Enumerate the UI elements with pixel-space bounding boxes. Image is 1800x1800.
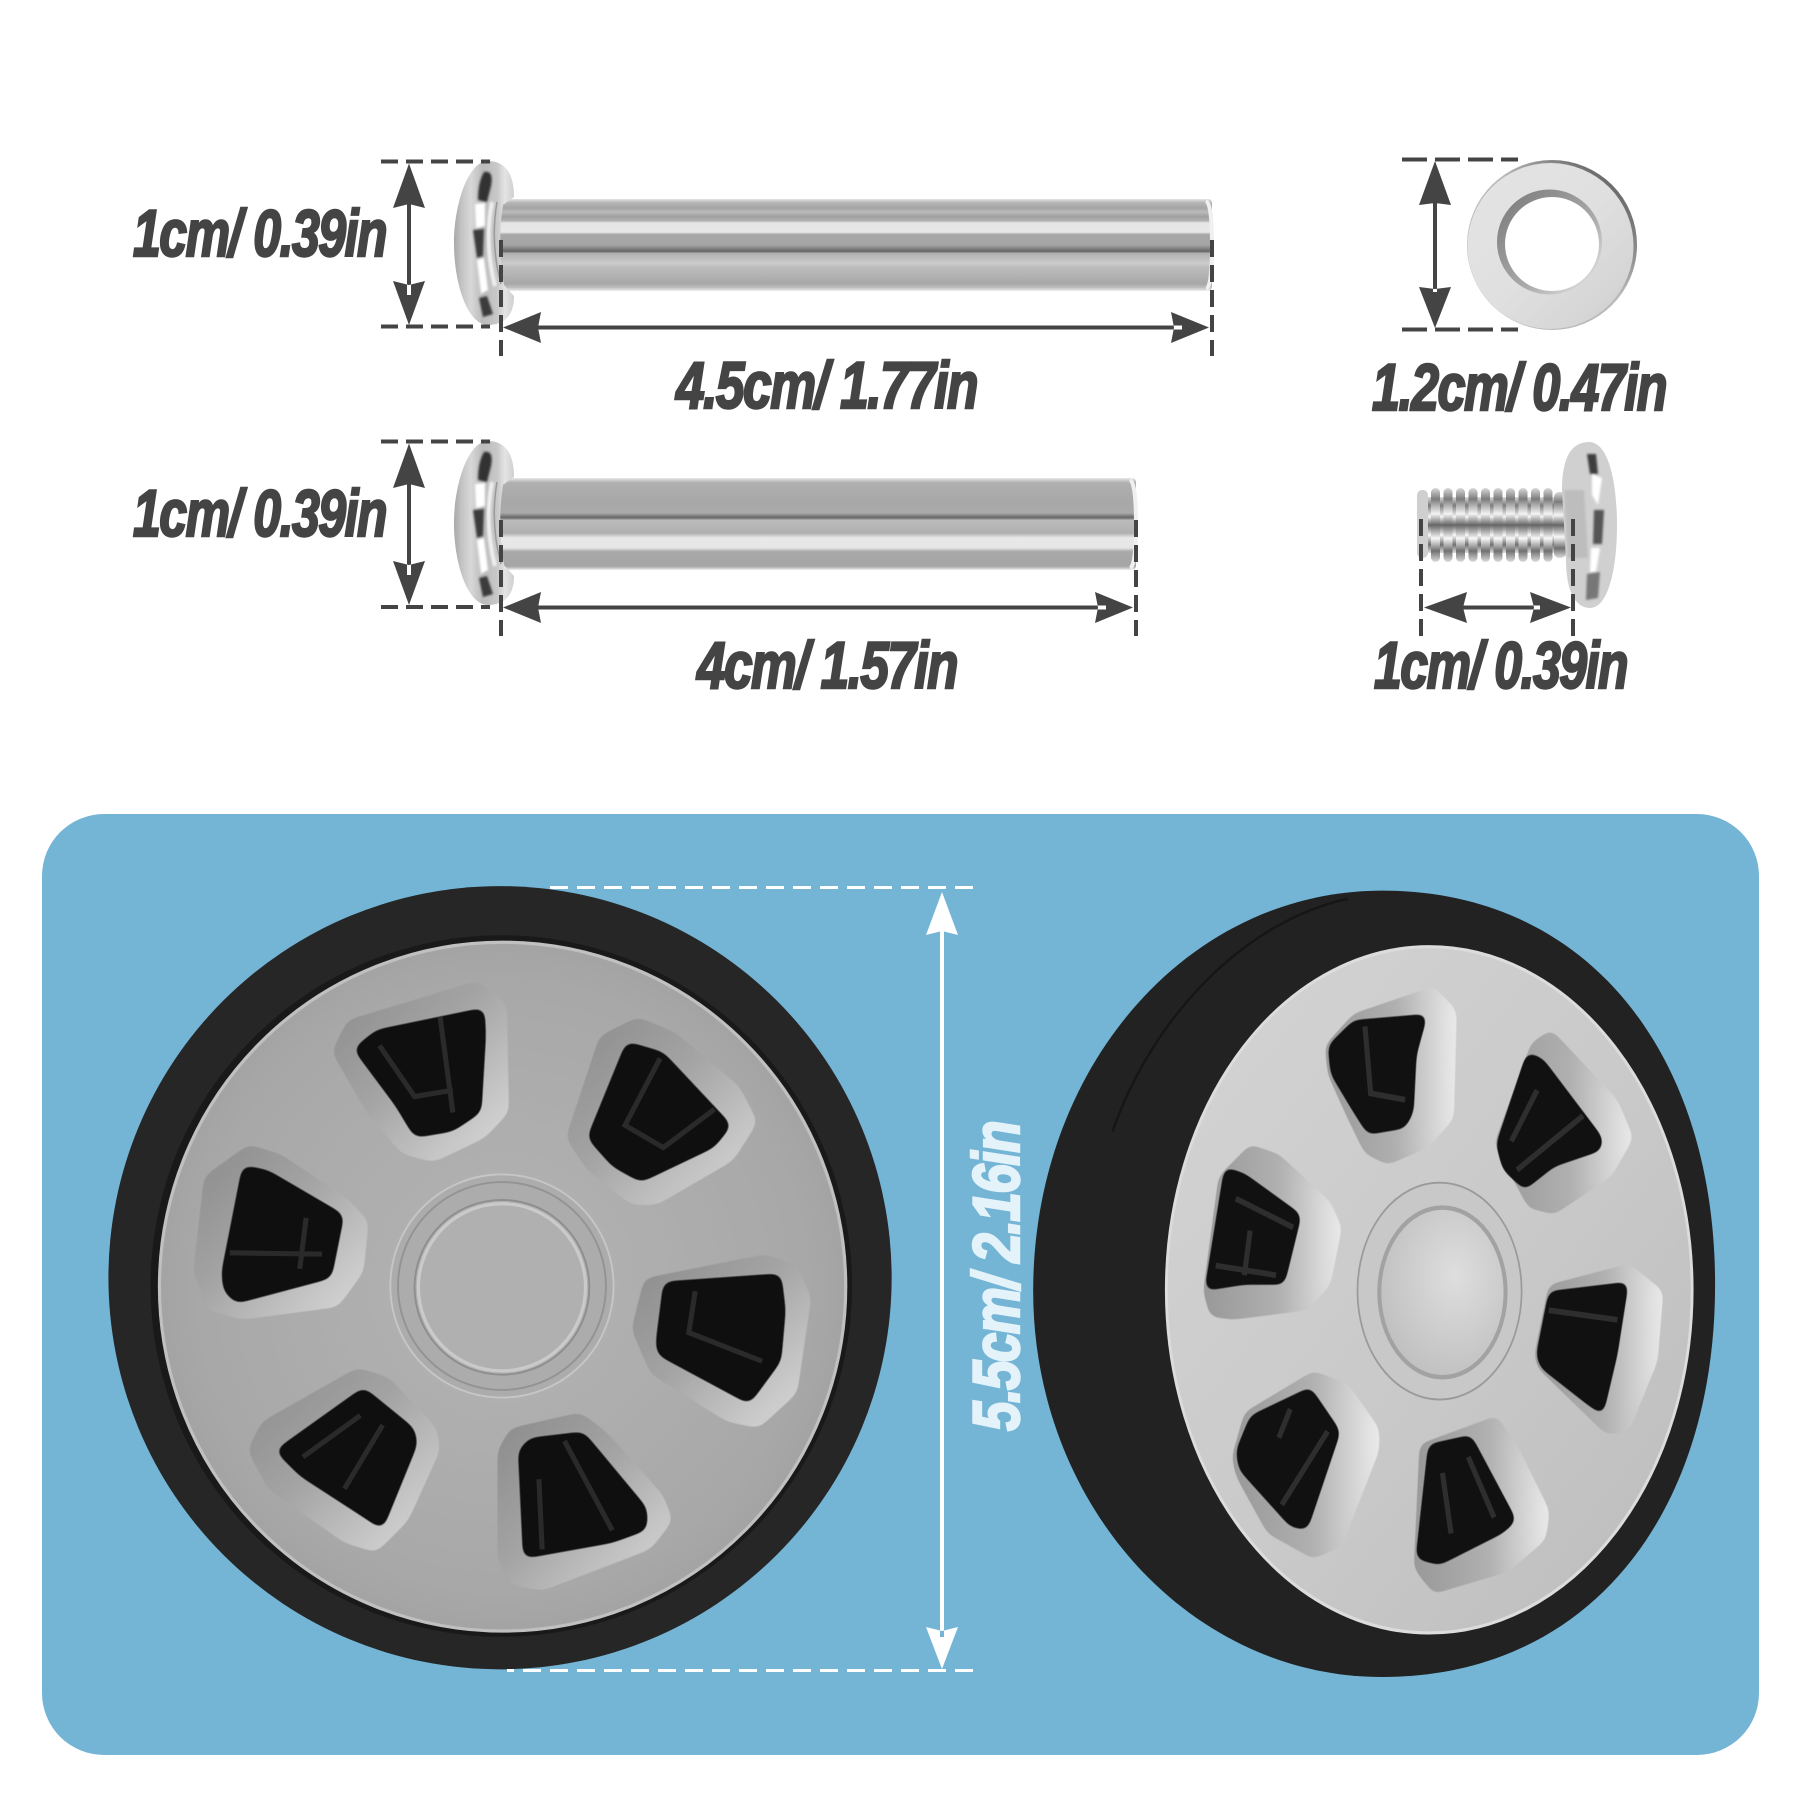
- height arrow: [393, 444, 425, 605]
- spoke hole: left: [193, 1144, 369, 1320]
- spoke hole: top: [332, 980, 509, 1162]
- height arrow: [393, 164, 425, 325]
- label: long axle length: 4.5cm/ 1.77in: [674, 348, 977, 422]
- screw thread: [1417, 488, 1567, 562]
- length dashes: [501, 240, 1212, 356]
- long axle end cap: [1206, 201, 1212, 289]
- short axle end cap: [1130, 480, 1136, 568]
- tire: [108, 886, 892, 1669]
- length dashes: [501, 520, 1136, 636]
- bolt 4cm with dimensions: [381, 441, 1136, 636]
- spoke hole: right: [1534, 1264, 1663, 1435]
- spoke hole: top right: [1494, 1030, 1634, 1215]
- screw arrow: [1424, 592, 1571, 623]
- hub: [390, 1174, 614, 1398]
- label: washer size: 1.2cm/ 0.47in: [1372, 350, 1666, 424]
- bolt 4.5cm with dimensions: [381, 161, 1212, 356]
- panel: blue background: [42, 814, 1759, 1755]
- label: short axle length: 4cm/ 1.57in: [695, 628, 957, 702]
- tire body: [1033, 891, 1715, 1677]
- spoke hole: top right: [566, 1017, 758, 1205]
- label: short axle head size: 1cm/ 0.39in: [133, 476, 386, 550]
- screw with dimension: [1417, 442, 1617, 636]
- spoke hole: bottom: [1414, 1415, 1550, 1594]
- length arrow: [503, 312, 1209, 343]
- spoke hole: bottom left: [247, 1368, 440, 1553]
- screw head: [1562, 442, 1617, 608]
- spoke hole: bottom left: [1232, 1371, 1379, 1559]
- short axle shaft: [497, 478, 1136, 570]
- spoke hole: left: [1203, 1144, 1342, 1320]
- wheel: angled view: [1033, 891, 1715, 1677]
- silver plate: [1166, 947, 1692, 1633]
- long axle shaft: [497, 199, 1212, 291]
- wheel: front view: [108, 886, 892, 1669]
- height dashes and head: [381, 161, 514, 326]
- label: wheel diameter: 5.5cm/ 2.16in: [959, 1122, 1033, 1431]
- spoke hole: right: [631, 1254, 811, 1428]
- washer ring: [1467, 160, 1637, 330]
- length arrow: [503, 592, 1133, 623]
- dashed guides: [507, 888, 973, 1670]
- label: screw length: 1cm/ 0.39in: [1374, 628, 1627, 702]
- tire seam: [1112, 899, 1348, 1132]
- height dashes: [381, 442, 490, 607]
- short axle head: [454, 441, 514, 605]
- washer arrow: [1419, 161, 1451, 328]
- hub: [1357, 1183, 1522, 1400]
- silver plate: [159, 942, 846, 1631]
- label: long axle head size: 1cm/ 0.39in: [133, 196, 386, 270]
- white arrow: [926, 892, 958, 1669]
- spoke hole: top: [1325, 986, 1457, 1165]
- spoke hole: bottom: [497, 1412, 673, 1591]
- screw dashes: [1421, 519, 1573, 636]
- washer dashes: [1402, 160, 1518, 330]
- white height dimension: [507, 888, 973, 1670]
- washer with dimension: [1402, 160, 1637, 330]
